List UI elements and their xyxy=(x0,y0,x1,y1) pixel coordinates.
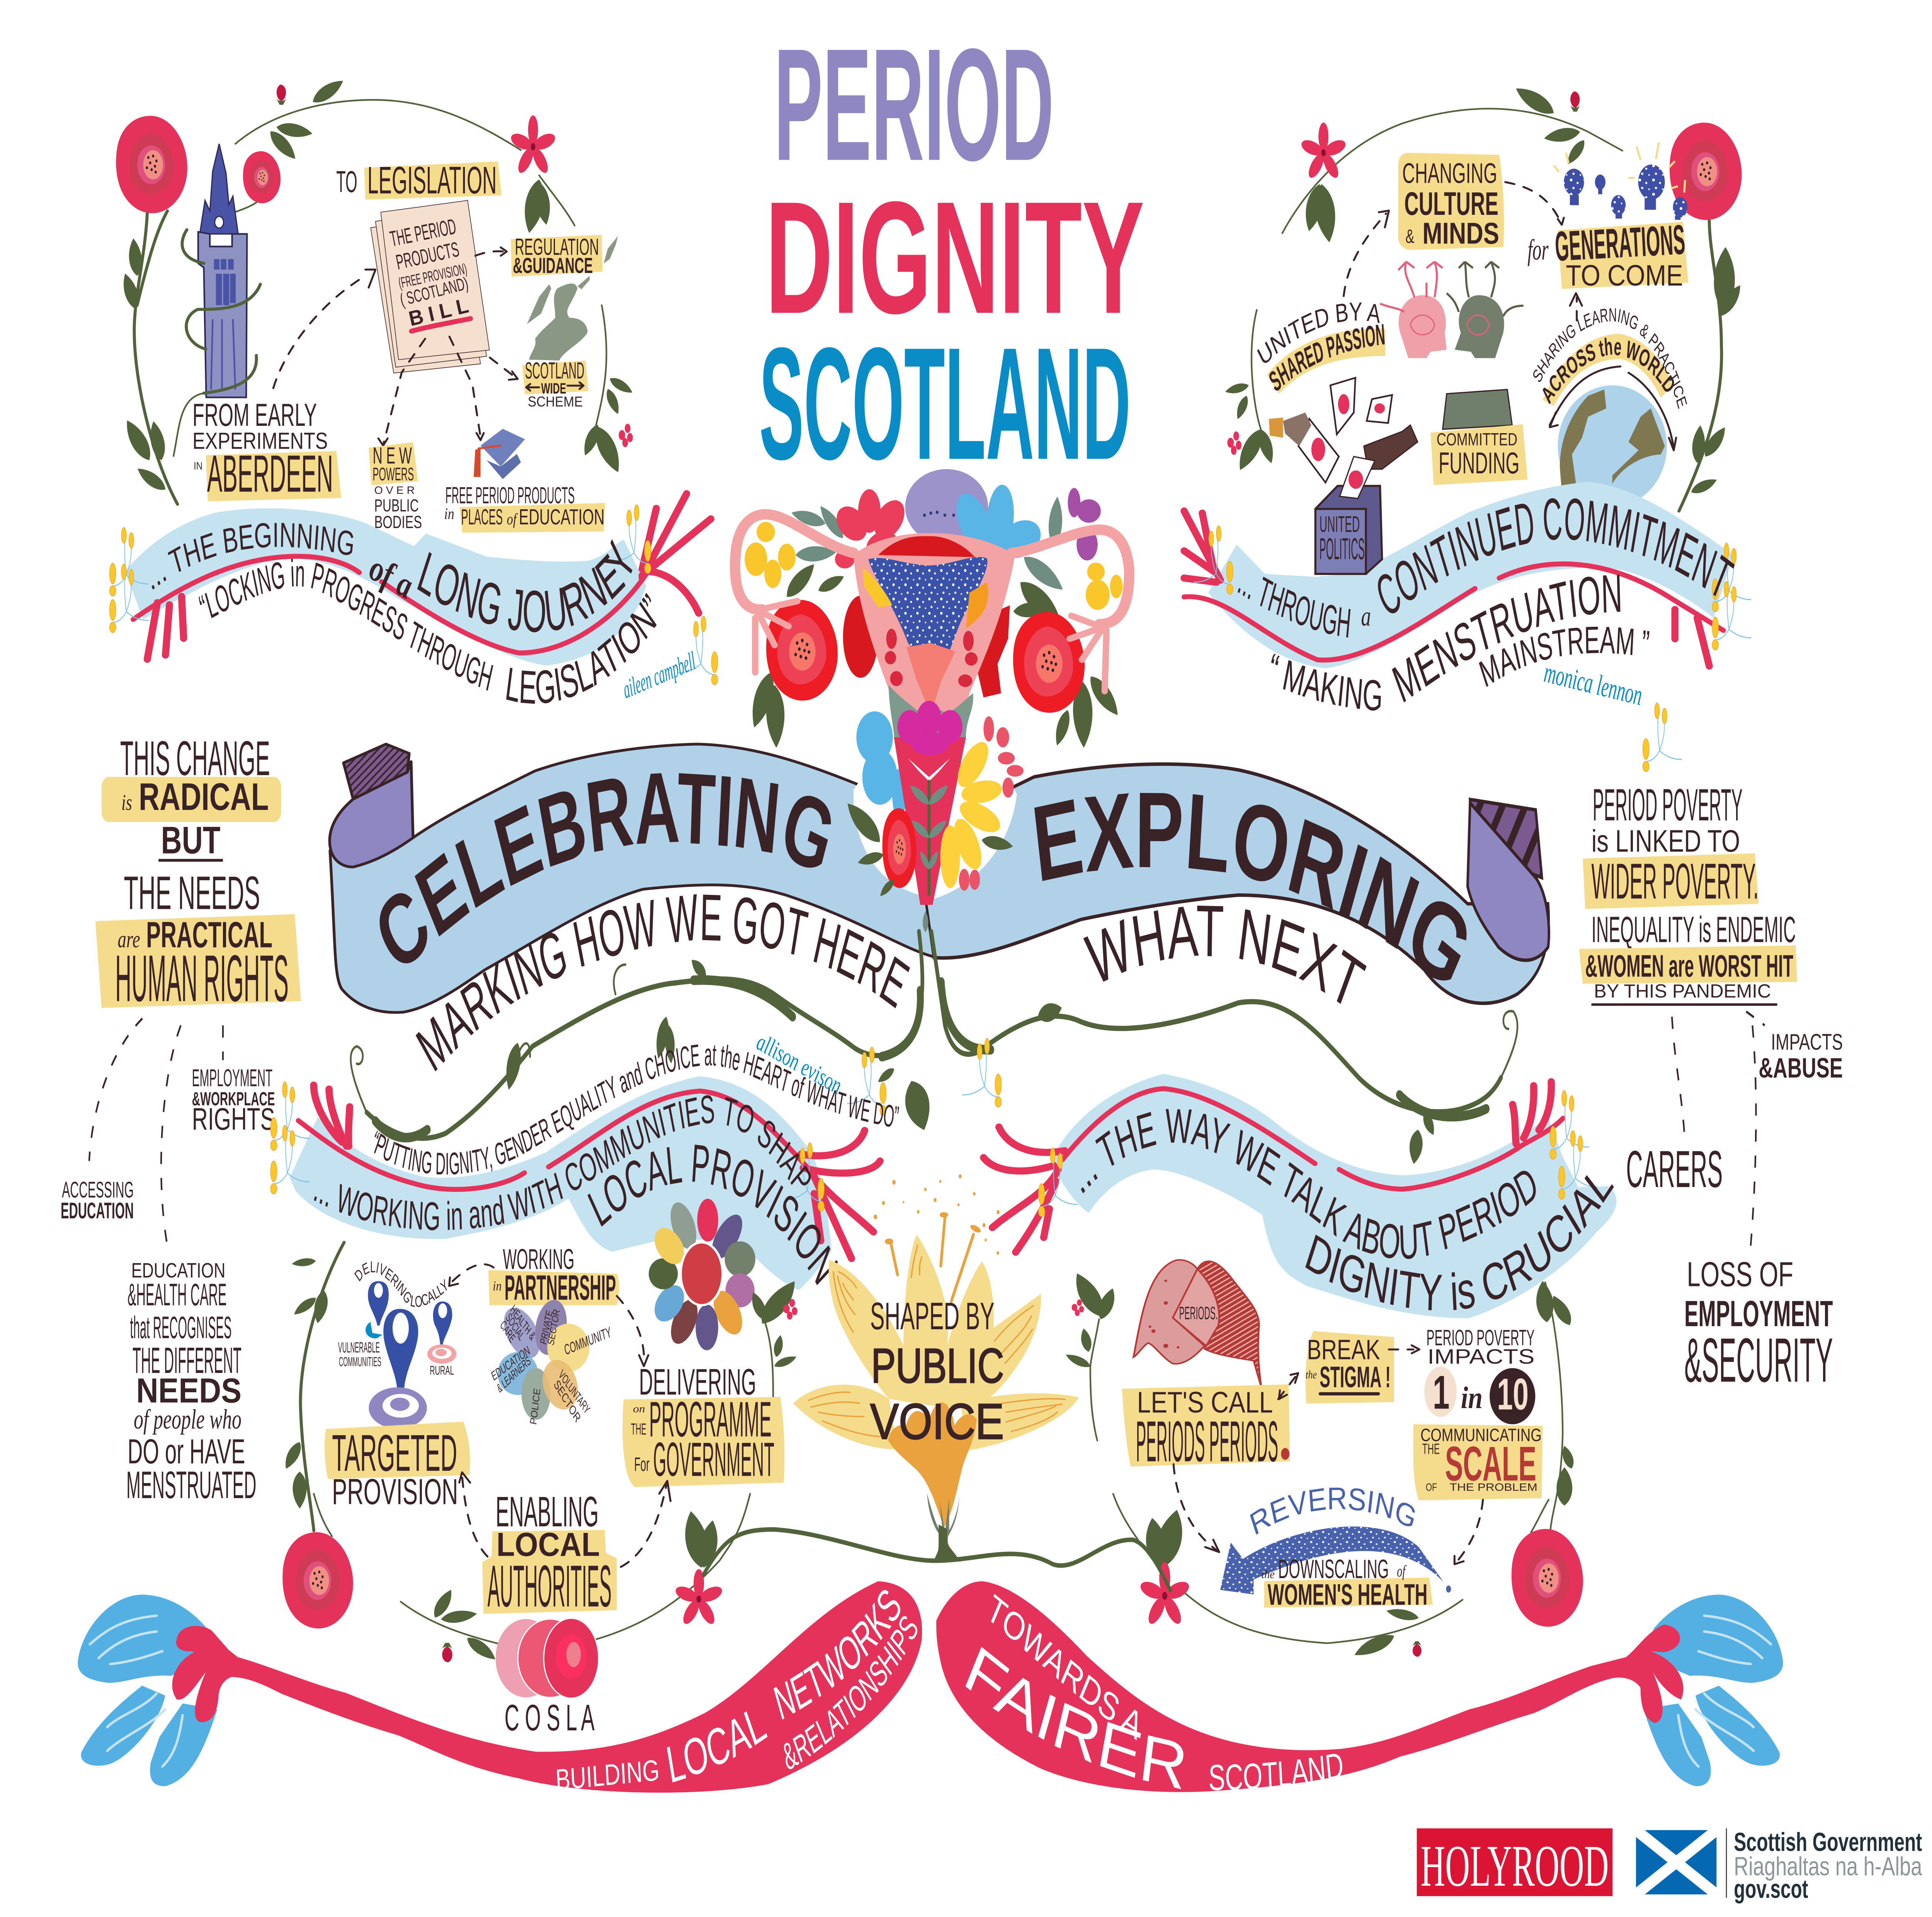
title xyxy=(759,16,1145,493)
icon: globe xyxy=(1550,366,1676,507)
heading: a: a xyxy=(1361,601,1371,632)
icon: two heads xyxy=(1380,262,1524,358)
text: this change is radical: HUMAN RIGHTS xyxy=(115,942,289,1015)
text: carers: CARERS xyxy=(1626,1140,1723,1198)
icon: location pins: COMMUNITIES xyxy=(339,1354,381,1369)
icon: location pins: RURAL xyxy=(430,1364,454,1378)
working in partnership xyxy=(488,1243,619,1307)
free period products: EDUCATION xyxy=(519,505,605,529)
text: accessing education xyxy=(61,1177,134,1223)
free period products: PLACES xyxy=(461,505,503,529)
title: PERIOD xyxy=(774,16,1054,194)
text: period poverty linked to wider poverty: is LINKED TO xyxy=(1592,823,1740,858)
poppy and flower xyxy=(1300,122,1742,220)
communicating the scale: THE PROBLEM xyxy=(1450,1482,1537,1493)
break the stigma: BREAK xyxy=(1307,1334,1380,1365)
text: employment and workplace rights: &WORKPLACE xyxy=(192,1089,275,1110)
shared world band xyxy=(1543,334,1672,406)
committed funding: COMMITTED xyxy=(1437,430,1517,449)
illustration and notes: GENERATIONS xyxy=(1554,216,1686,270)
stat: 1 in 10 xyxy=(1424,1366,1535,1424)
central banner xyxy=(330,744,1549,1085)
from early experiments in aberdeen: FROM EARLY xyxy=(192,398,317,433)
text: education and health care xyxy=(126,1259,256,1507)
text: accessing education: ACCESSING xyxy=(62,1177,134,1203)
petal labels: CARE xyxy=(498,1318,517,1346)
text: this change is radical: PRACTICAL xyxy=(146,915,272,955)
free period products: FREE PERIOD PRODUCTS xyxy=(446,482,575,509)
downscaling of women's health: DOWNSCALING xyxy=(1278,1555,1389,1584)
chart: partnership petals xyxy=(497,1298,589,1420)
text: period poverty linked to wider poverty xyxy=(1579,779,1797,1005)
delivering on the programme for government xyxy=(622,1361,784,1487)
petal labels: EDUCATION xyxy=(490,1343,532,1384)
title: SCOTLAND xyxy=(759,315,1131,493)
heading: the beginning: ... THE BEGINNING xyxy=(140,515,357,598)
notes and illustration: STIGMA ! xyxy=(1320,1361,1391,1394)
text: building: BUILDING xyxy=(555,1754,660,1797)
central vines xyxy=(351,932,1517,1165)
text: reversing: REVERSING xyxy=(1246,1481,1420,1542)
text: impacts abuse xyxy=(1759,1029,1843,1084)
icon: speech bubble periods: PERIODS. xyxy=(1179,1303,1218,1323)
heading: to legislation: TO xyxy=(336,165,357,199)
text: fairer: FAIRER xyxy=(956,1631,1191,1804)
dashed lines from human rights xyxy=(89,1019,223,1251)
enabling local authorities xyxy=(482,1488,617,1619)
panel: towards a fairer scotland xyxy=(936,1581,1783,1804)
petal labels: SOCIAL xyxy=(503,1310,526,1344)
heading: long journey: LONG JOURNEY xyxy=(411,532,645,645)
regulation and guidance: &GUIDANCE xyxy=(513,253,593,278)
text: united by a: UNITED BY A xyxy=(1254,297,1382,371)
text: towards a: TOWARDS A xyxy=(981,1587,1148,1748)
document: bill: THE PERIOD xyxy=(388,214,458,251)
text: loss of employment and security: LOSS OF xyxy=(1687,1255,1793,1294)
communicating the scale: COMMUNICATING xyxy=(1420,1425,1542,1445)
panel: working in and with communities: GOVERNMENT xyxy=(653,1432,774,1486)
new powers: BODIES xyxy=(374,513,422,532)
stamens xyxy=(1194,526,1751,772)
heading: to legislation xyxy=(336,158,502,202)
icon: votes and ballot box: UNITED xyxy=(1320,512,1360,537)
generations to come: TO COME xyxy=(1566,259,1683,292)
text: education and health care: EDUCATION xyxy=(131,1259,225,1282)
signature: allison evison: allison evison xyxy=(754,1027,844,1100)
subheading: marking how we got here: MARKING HOW WE GOT HERE xyxy=(408,881,917,1085)
icon: location pins: VULNERABLE xyxy=(338,1340,380,1356)
icon: aberdeen tower xyxy=(182,144,260,397)
working in partnership: in xyxy=(493,1279,502,1293)
changing culture and minds: MINDS xyxy=(1422,217,1499,250)
icon: uterus with flowers xyxy=(735,469,1129,932)
heading: the way we talk about period: ... THE WAY WE TALK ABOUT PERIOD xyxy=(1061,1099,1545,1270)
new powers: N E W xyxy=(372,442,412,469)
communicating the scale: OF xyxy=(1426,1482,1437,1493)
delivering on the programme for government: on xyxy=(633,1402,645,1415)
illustration and notes xyxy=(1224,82,1745,574)
text: this change is radical: THE NEEDS xyxy=(124,867,260,919)
petal labels: VOLUNTARY xyxy=(556,1367,592,1417)
text: this change is radical xyxy=(95,731,301,1015)
heading: celebrating: CELEBRATING xyxy=(361,750,845,993)
petal labels: POLICE xyxy=(528,1387,543,1425)
text: education and health care: MENSTRUATED xyxy=(126,1464,256,1507)
illustration and notes: ABERDEEN xyxy=(207,444,333,503)
free period products: in xyxy=(444,505,454,522)
subheading: what next: WHAT NEXT xyxy=(1080,890,1372,1026)
text: accessing education: EDUCATION xyxy=(61,1198,134,1223)
stamens xyxy=(270,1047,886,1211)
centre flower: shaped by public voice: PUBLIC xyxy=(871,1339,1004,1393)
notes and illustration: PERIOD POVERTY xyxy=(1427,1325,1534,1350)
quote: making: “ MAKING xyxy=(1264,644,1384,720)
bottom vine xyxy=(704,1529,1170,1590)
document: bill: B I L L xyxy=(406,294,471,331)
petal labels: & LEARNERS xyxy=(495,1354,533,1396)
poppies xyxy=(116,116,556,213)
document: bill: PRODUCTS xyxy=(394,238,461,274)
text: employment and workplace rights: EMPLOYMENT xyxy=(192,1065,272,1092)
free period products: of xyxy=(507,510,518,528)
communicating the scale xyxy=(1413,1424,1543,1500)
quote: legislation: LEGISLATION” xyxy=(503,585,669,714)
scotland wide scheme xyxy=(522,357,588,410)
targeted provision: PROVISION xyxy=(332,1471,458,1512)
text: scotland: SCOTLAND xyxy=(1208,1745,1345,1798)
icon: light bulbs xyxy=(1554,142,1687,220)
centre flower: shaped by public voice xyxy=(793,1174,1079,1561)
new powers: PUBLIC xyxy=(374,496,419,515)
notes and illustration: SCALE xyxy=(1445,1436,1536,1491)
committed funding xyxy=(1430,390,1527,485)
communicating the scale: THE xyxy=(1422,1441,1440,1457)
quote: locking in progress through: “LOCKING in PROGRESS THROUGH xyxy=(196,552,497,699)
ribbon: continued commitment xyxy=(1184,482,1733,668)
text: loss of employment and security xyxy=(1684,1255,1833,1395)
text: education and health care: of people who xyxy=(134,1404,242,1435)
generations to come xyxy=(1527,216,1688,292)
text: period poverty linked to wider poverty: INEQUALITY is ENDEMIC xyxy=(1592,910,1796,950)
text: employment and workplace rights xyxy=(192,1065,275,1136)
petal labels: SECTOR xyxy=(546,1308,562,1347)
icon: speech bubble periods xyxy=(1133,1260,1261,1387)
petal labels: HEALTH & xyxy=(508,1302,537,1344)
text: shared passion: SHARED PASSION xyxy=(1265,318,1386,398)
new powers: O V E R xyxy=(374,484,415,496)
text: loss of employment and security: &SECURITY xyxy=(1684,1325,1833,1395)
petal labels: PRIVATE xyxy=(538,1309,555,1346)
delivering on the programme for government: DELIVERING xyxy=(639,1361,756,1403)
text: impacts abuse: &ABUSE xyxy=(1759,1053,1843,1084)
downscaling of women's health xyxy=(1261,1555,1433,1611)
arrow: reversing xyxy=(1220,1526,1451,1594)
heading: exploring: EXPLORING xyxy=(1027,770,1486,1012)
panel: building local networks xyxy=(78,1579,924,1797)
icon: votes and ballot box: POLITICS xyxy=(1320,532,1365,566)
icon: scotland map xyxy=(527,236,618,361)
petal labels: COMMUNITY xyxy=(563,1324,612,1359)
break the stigma: the xyxy=(1306,1369,1317,1381)
stat: 1 in 10: 1 xyxy=(1433,1366,1450,1419)
text: period poverty linked to wider poverty: WIDER POVERTY. xyxy=(1592,853,1759,909)
logo: holyrood: HOLYROOD xyxy=(1420,1833,1609,1898)
shape: left red tube and blue hand xyxy=(78,1581,922,1793)
heading: local provision: LOCAL PROVISION xyxy=(581,1133,846,1295)
heading: to legislation: LEGISLATION xyxy=(367,158,497,202)
text: this change is radical: THIS CHANGE xyxy=(120,731,270,786)
text: this change is radical: are xyxy=(117,925,140,953)
delivering on the programme for government: THE xyxy=(631,1420,646,1438)
banner: left xyxy=(330,744,937,1012)
notes and illustration xyxy=(281,1199,803,1738)
scotland wide scheme: SCHEME xyxy=(528,394,583,410)
text: sharing learning and practice: SHARING LEARNING & PRACTICE xyxy=(1530,304,1690,411)
heading: through: ... THROUGH xyxy=(1233,556,1353,647)
committed funding: FUNDING xyxy=(1439,447,1519,480)
heading: dignity is crucial: DIGNITY is CRUCIAL xyxy=(1299,1153,1621,1322)
period poverty impacts xyxy=(1427,1325,1534,1368)
break the stigma xyxy=(1306,1331,1394,1403)
free period products xyxy=(444,482,605,533)
stat: 1 in 10: in xyxy=(1461,1381,1483,1415)
let's call periods periods: LET'S CALL xyxy=(1137,1386,1273,1419)
shape: right red tube and blue hand xyxy=(936,1581,1783,1792)
title: DIGNITY xyxy=(765,168,1145,347)
petal labels xyxy=(490,1302,612,1425)
icon: votes and ballot box xyxy=(1269,378,1418,574)
targeted provision xyxy=(325,1422,470,1512)
text: impacts abuse: IMPACTS xyxy=(1771,1029,1843,1055)
vine wreath xyxy=(1224,82,1745,511)
dashed arrows xyxy=(1344,182,1582,320)
panel: working in and with communities xyxy=(0,0,900,1738)
united by a shared passion xyxy=(1267,328,1385,394)
text: education and health care: NEEDS xyxy=(136,1371,242,1410)
stamens xyxy=(962,1038,1598,1216)
heading: of a: of a xyxy=(366,545,417,607)
logo: scottish government: Riaghaltas na h-Alba xyxy=(1734,1852,1922,1881)
dashed arrows xyxy=(449,1264,670,1567)
changing culture and minds: & xyxy=(1405,226,1414,247)
notes and illustration: PARTNERSHIP xyxy=(505,1268,616,1307)
quote: menstruation: MENSTRUATION xyxy=(1386,563,1623,714)
text: period poverty linked to wider poverty: BY THIS PANDEMIC xyxy=(1594,981,1771,1002)
document: bill: ( SCOTLAND) xyxy=(398,274,470,310)
new powers: POWERS xyxy=(372,464,414,484)
working in partnership: WORKING xyxy=(503,1243,575,1275)
regulation and guidance: REGULATION xyxy=(515,234,599,260)
vine wreath xyxy=(119,75,634,504)
icon: cosla discs xyxy=(496,1618,599,1738)
heading: continued commitment: CONTINUED COMMITMENT xyxy=(1369,486,1740,630)
arrows from bill xyxy=(378,247,518,446)
regulation and guidance xyxy=(511,234,602,278)
text: delivering locally: DELIVERING LOCALLY xyxy=(352,1259,451,1311)
notes and illustration: PERIODS PERIODS xyxy=(1136,1409,1278,1473)
logo: scottish government: gov.scot xyxy=(1734,1875,1808,1903)
signature: aileen campbell: aileen campbell xyxy=(621,646,698,704)
icon: cosla discs: C O S L A xyxy=(505,1697,595,1738)
text: networks: NETWORKS xyxy=(769,1579,909,1731)
text: employment and workplace rights: RIGHTS xyxy=(192,1101,275,1136)
notes and illustration: AUTHORITIES xyxy=(488,1553,612,1619)
text: local: LOCAL xyxy=(663,1694,772,1794)
dashed arrows to health xyxy=(1173,1464,1483,1564)
icon: location pins xyxy=(338,1281,456,1429)
changing culture and minds: CHANGING xyxy=(1402,157,1497,189)
ribbon: long journey xyxy=(125,494,711,665)
dashed lines from poverty xyxy=(1672,1012,1765,1255)
arrows right of box xyxy=(1278,1345,1419,1399)
text: period poverty linked to wider poverty: PERIOD POVERTY xyxy=(1593,779,1743,830)
panel: through a continued commitment xyxy=(1184,82,1751,772)
changing culture and minds: CULTURE xyxy=(1404,185,1498,222)
vines and poppy xyxy=(281,1242,803,1664)
centre flower: shaped by public voice: VOICE xyxy=(870,1393,1004,1449)
text: loss of employment and security: EMPLOYMENT xyxy=(1684,1294,1833,1334)
vines and flowers xyxy=(1063,1270,1583,1661)
notes and illustration xyxy=(1063,1260,1583,1661)
document: bill xyxy=(371,201,490,373)
text: period poverty linked to wider poverty: &WOMEN are WORST HIT xyxy=(1585,948,1793,983)
downscaling of women's health: WOMEN'S HEALTH xyxy=(1268,1578,1427,1611)
panel: the beginning of a long journey xyxy=(109,75,718,714)
panel: working in and with communities: PROGRAMME xyxy=(649,1391,772,1447)
centre flower: shaped by public voice: SHAPED BY xyxy=(870,1295,995,1338)
quote: mainstream: MAINSTREAM ” xyxy=(1475,619,1651,696)
text: relationships: &RELATIONSHIPS xyxy=(777,1607,924,1779)
text: education and health care: THE DIFFERENT xyxy=(133,1340,242,1381)
delivering on the programme for government: For xyxy=(634,1454,650,1475)
stamens xyxy=(109,505,718,685)
icon: colour wheel flower xyxy=(649,1199,755,1350)
from early experiments in aberdeen: IN xyxy=(194,459,202,472)
from early experiments in aberdeen xyxy=(192,398,341,503)
arrow: aberdeen to bill xyxy=(273,270,376,388)
logo: scottish government: Scottish Government xyxy=(1734,1828,1922,1857)
petal labels: SECTOR xyxy=(552,1377,583,1425)
notes and illustration: TARGETED xyxy=(332,1424,457,1482)
new powers xyxy=(369,442,422,532)
enabling local authorities: ENABLING xyxy=(496,1488,599,1536)
quote: putting dignity: “PUTTING DIGNITY, GENDER EQUALITY and CHOICE at the HEART of WHAT WE DO” xyxy=(367,1037,900,1181)
stat: 1 in 10: 10 xyxy=(1497,1369,1529,1419)
ribbon: local provision xyxy=(289,1076,880,1290)
scotland wide scheme: SCOTLAND xyxy=(525,357,584,384)
downscaling of women's health: of xyxy=(1397,1562,1407,1580)
banner: right xyxy=(917,764,1549,1003)
text: education and health care: &HEALTH CARE xyxy=(128,1277,227,1312)
icon: graduation cap xyxy=(474,429,525,479)
text: education and health care: that RECOGNISES xyxy=(130,1310,231,1345)
ribbon: crucial xyxy=(983,1074,1617,1318)
enabling local authorities: LOCAL xyxy=(497,1526,600,1563)
illustration and notes xyxy=(116,75,634,533)
generations to come: for xyxy=(1527,234,1549,266)
changing culture and minds xyxy=(1398,153,1504,250)
logo: scottish government xyxy=(1636,1828,1922,1903)
text: this change is radical: RADICAL xyxy=(139,776,269,818)
from early experiments in aberdeen: EXPERIMENTS xyxy=(192,428,328,454)
panel: the way we talk about period dignity xyxy=(962,1038,1621,1661)
scotland wide scheme: WIDE xyxy=(541,380,566,397)
period poverty impacts: IMPACTS xyxy=(1427,1345,1534,1368)
text: education and health care: DO or HAVE xyxy=(128,1432,245,1471)
document: bill: (FREE PROVISION) xyxy=(397,260,468,292)
downscaling of women's health: the xyxy=(1261,1568,1275,1581)
text: this change is radical: is xyxy=(121,790,132,815)
text: across the world: ACROSS the WORLD xyxy=(1537,333,1679,408)
let's call periods periods xyxy=(1122,1385,1290,1473)
text: this change is radical: BUT xyxy=(161,819,221,862)
signature: monica lennon: monica lennon xyxy=(1542,656,1644,712)
